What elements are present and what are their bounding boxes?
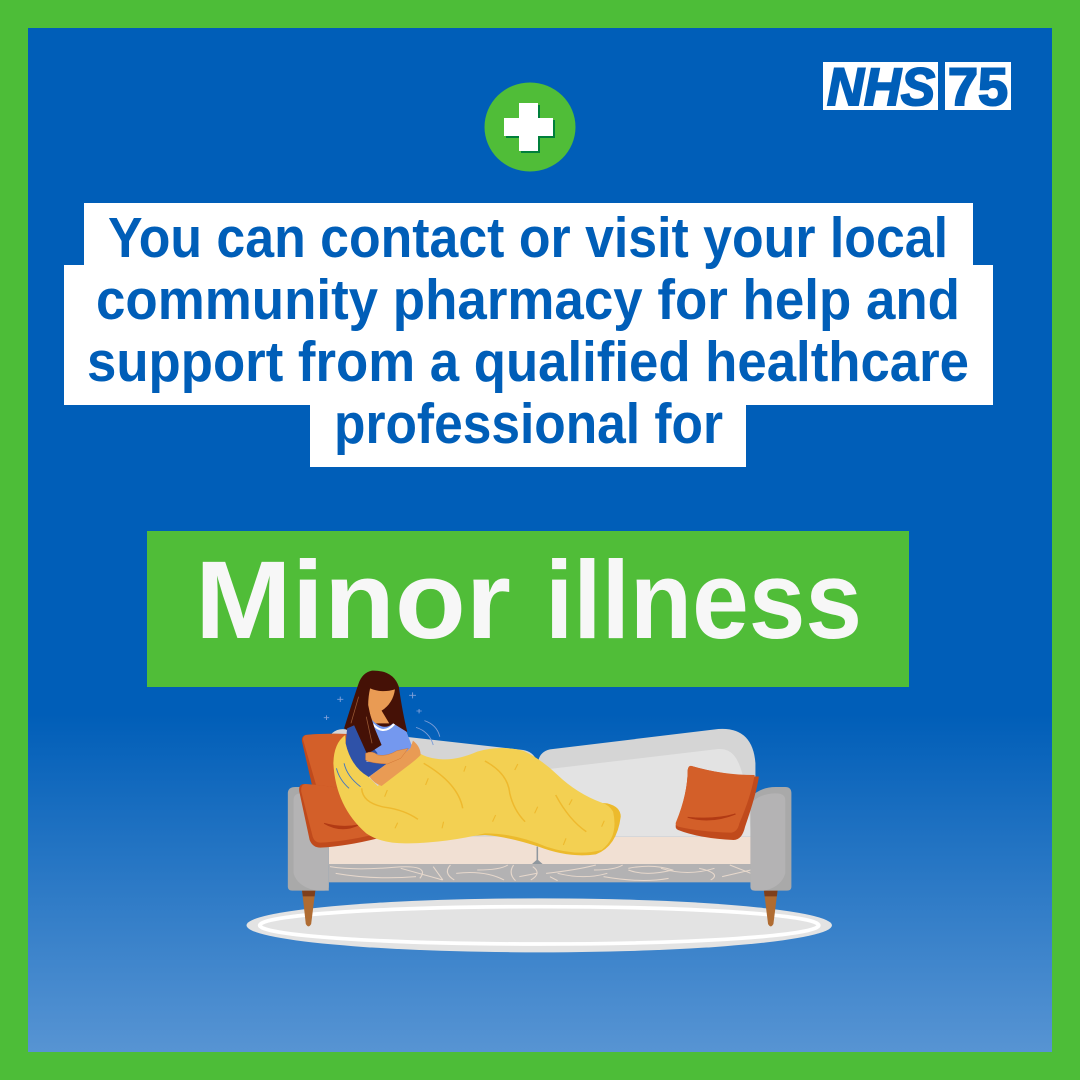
blanket [333,735,621,855]
woman: front hair strands [351,697,382,754]
woman: face and neck [368,688,395,723]
NHS 75 logo [823,58,1011,117]
illustration: woman resting on sofa under blanket [247,671,832,952]
shiver and dizziness marks [324,692,440,788]
topic banner: Minor illness: illness [545,539,862,662]
left pillows [299,734,378,848]
sofa arms [288,787,791,891]
sofa legs [302,890,778,926]
topic banner: Minor illness [147,531,909,687]
topic banner: Minor illness: Minor [195,539,511,662]
sofa seat [329,837,751,882]
NHS 75 logo: NHS [827,58,935,117]
woman: shirt [346,720,412,777]
heading text block: support from a qualified healthcare [87,330,969,394]
woman: hair [344,671,407,753]
rug [247,898,832,952]
NHS 75 logo: 75 [948,58,1008,117]
heading text block: professional for [334,392,723,456]
icon: pharmacy green cross badge [484,82,576,172]
right pillow [676,766,759,840]
woman: arm [369,741,421,786]
woman: hand [366,748,408,764]
heading text block: You can contact or visit your local [108,206,948,270]
sofa back cushions [332,729,755,840]
heading text block [64,203,993,467]
heading text block: community pharmacy for help and [96,268,960,332]
